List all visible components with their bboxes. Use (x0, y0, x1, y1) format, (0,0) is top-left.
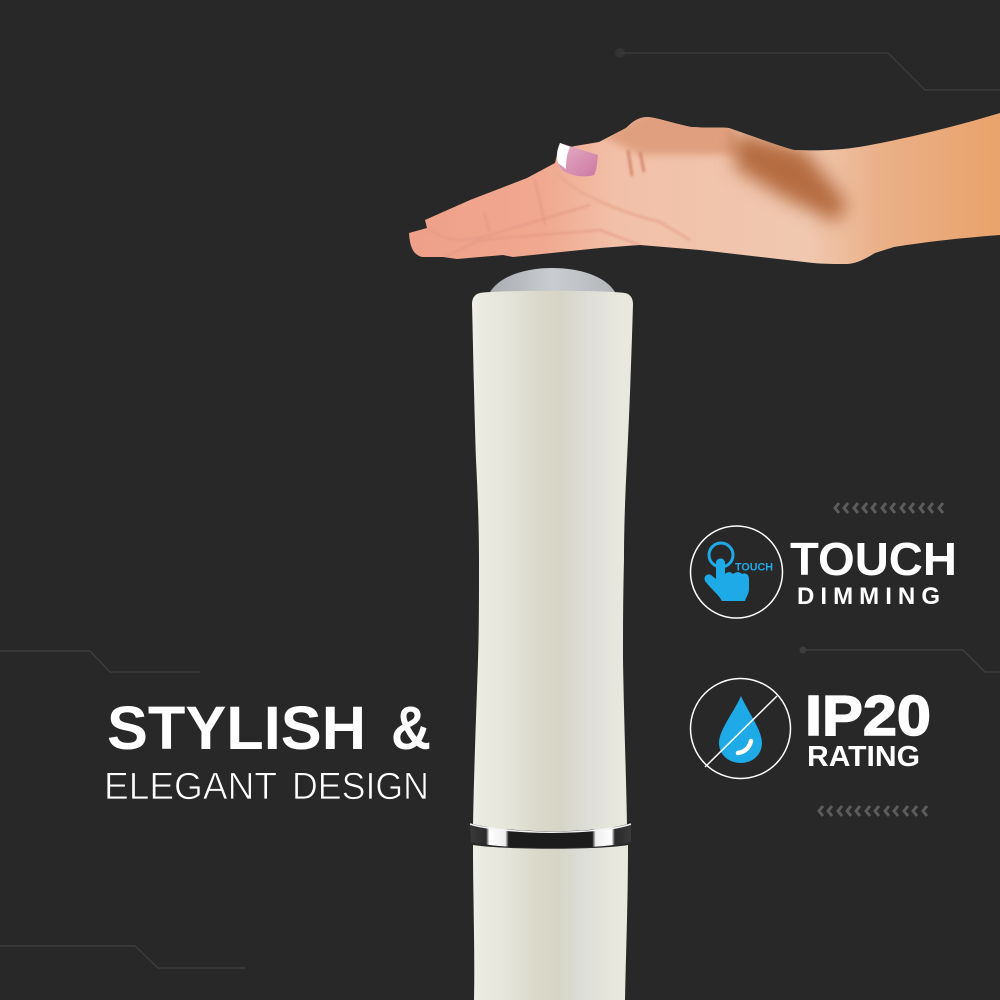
heading: stylish and elegant design: STYLISH (107, 694, 366, 762)
circuit line: bottom left (0, 946, 245, 968)
lamp chrome ring (470, 823, 631, 848)
label: IP20 rating: RATING (807, 741, 920, 773)
label: touch dimming: TOUCH (790, 533, 957, 585)
lamp upper body (472, 291, 633, 838)
label: IP20 rating: IP20 (805, 684, 931, 748)
finger creases (480, 184, 640, 246)
circuit line: middle right (800, 646, 1000, 672)
nail tip (557, 143, 570, 169)
heading: stylish and elegant design: DESIGN (292, 766, 429, 808)
icon: crossed water drop in circle (690, 678, 790, 778)
icon: touch hand in circle: TOUCH (735, 562, 773, 574)
chevron row top (835, 503, 943, 513)
knuckle creases (628, 150, 644, 176)
lamp lower body (473, 845, 628, 1000)
IP20 rating feature (690, 678, 931, 778)
heading: stylish and elegant design: & (391, 694, 431, 762)
circuit line: top right (615, 48, 1000, 90)
label: IP20 rating (805, 684, 931, 773)
lamp (470, 268, 633, 1000)
heading: stylish and elegant design (104, 694, 431, 808)
heading: stylish and elegant design: ELEGANT (104, 766, 277, 808)
label: touch dimming (790, 533, 957, 610)
label: touch dimming: DIMMING (797, 583, 940, 610)
lamp dome (490, 268, 615, 292)
thumbnail (558, 143, 598, 176)
thumb underside (581, 192, 690, 241)
circuit line: middle left (0, 651, 200, 672)
hand shadow band (735, 132, 848, 222)
icon: touch hand in circle (690, 526, 782, 618)
hand (409, 110, 1000, 264)
touch dimming feature (690, 526, 957, 618)
hand back tone (604, 117, 739, 158)
chevron row bottom (819, 806, 927, 816)
